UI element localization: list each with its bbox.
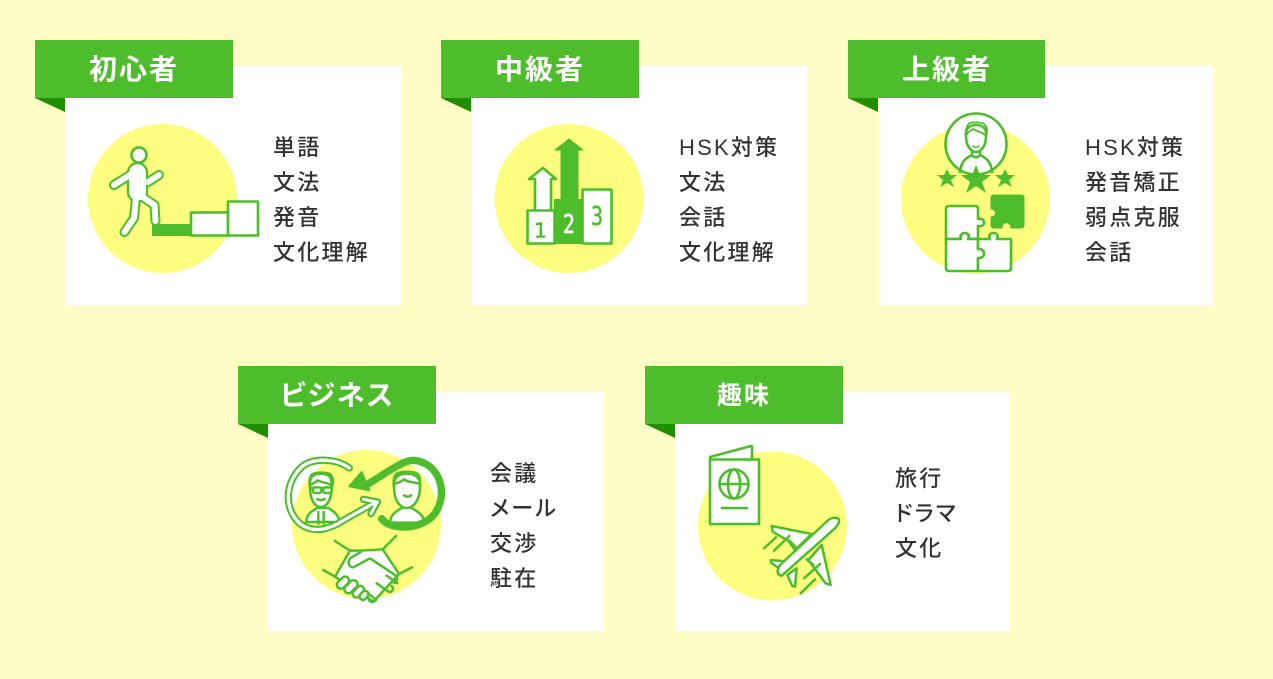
icon: podium with arrows: 1 — [534, 218, 547, 242]
list: business topics: 駐在 — [490, 566, 538, 591]
panel: beginner — [35, 40, 401, 305]
list: intermediate topics: 会話 — [679, 205, 727, 230]
heading: business: ビジネス — [280, 380, 395, 411]
list: intermediate topics — [679, 135, 779, 265]
icon: podium with arrows: 3 — [591, 202, 603, 232]
list: hobby topics: 文化 — [895, 536, 943, 561]
list: beginner topics: 文化理解 — [273, 240, 370, 265]
panel: business — [238, 366, 604, 631]
heading: intermediate: 中級者 — [495, 54, 585, 85]
list: business topics: 会議 — [490, 461, 538, 486]
icon: expert, stars and puzzle — [901, 114, 1050, 274]
list: business topics: 交渉 — [490, 531, 538, 556]
heading: beginner: 初心者 — [89, 54, 179, 85]
icon: business people and handshake — [288, 450, 441, 602]
panel: advanced — [848, 40, 1213, 305]
list: beginner topics: 文法 — [273, 170, 321, 195]
list: hobby topics — [895, 466, 958, 561]
list: beginner topics: 単語 — [273, 135, 321, 160]
icon: podium with arrows: 2 — [563, 210, 575, 240]
list: beginner topics — [273, 135, 370, 265]
panel: hobby — [645, 366, 1010, 631]
list: hobby topics: ドラマ — [895, 501, 958, 526]
icon: podium with arrows — [494, 124, 644, 273]
list: advanced topics: 発音矯正 — [1085, 170, 1182, 195]
icon: passport and plane — [698, 446, 847, 600]
list: beginner topics: 発音 — [273, 205, 321, 230]
icon: person climbing steps — [88, 124, 258, 273]
list: advanced topics: 弱点克服 — [1085, 205, 1182, 230]
list: advanced topics: 会話 — [1085, 240, 1133, 265]
list: intermediate topics: 文化理解 — [679, 240, 776, 265]
list: advanced topics: HSK対策 — [1085, 135, 1185, 160]
list: intermediate topics: 文法 — [679, 170, 727, 195]
list: business topics: メール — [490, 496, 558, 521]
heading: hobby: 趣味 — [717, 382, 771, 410]
list: intermediate topics: HSK対策 — [679, 135, 779, 160]
panel: intermediate — [441, 40, 807, 305]
heading: advanced: 上級者 — [902, 54, 992, 85]
list: hobby topics: 旅行 — [895, 466, 943, 491]
list: business topics — [490, 461, 558, 591]
list: advanced topics — [1085, 135, 1185, 265]
